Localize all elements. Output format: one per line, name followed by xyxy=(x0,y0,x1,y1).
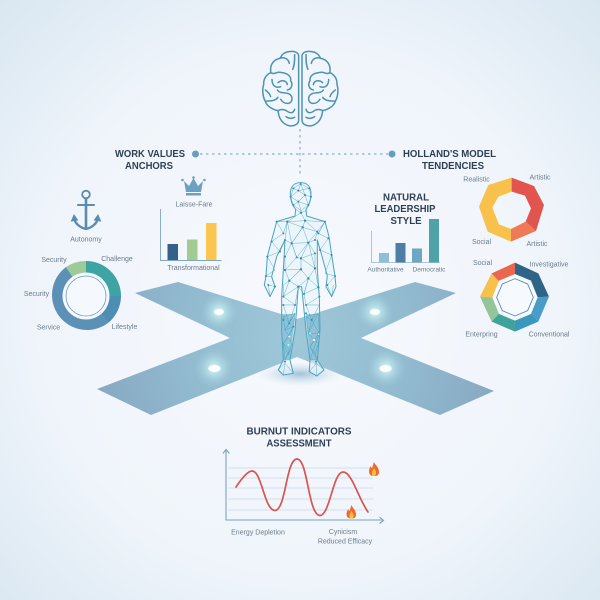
bar labels: Democratic xyxy=(413,266,446,274)
floor light: bottom right xyxy=(367,349,405,387)
figure mesh nodes xyxy=(265,183,336,363)
heading: burnout indicators assessment: ASSESSMENT xyxy=(266,438,332,450)
icon: flame upper xyxy=(369,462,379,476)
connector dot: holland xyxy=(388,150,396,158)
figure leg shading xyxy=(282,314,320,360)
octagon labels bottom: Enterpring xyxy=(465,332,498,338)
heading: holland's model tendencies: HOLLAND'S MODEL xyxy=(403,149,496,160)
octagon labels top: Social xyxy=(472,239,491,246)
figure knee highlights xyxy=(287,332,319,346)
donut segment: lifestyle xyxy=(99,296,121,323)
connector: dotted lines xyxy=(200,129,388,176)
icon: flame lower xyxy=(346,505,356,518)
label: Laissez-Faire: Laisse-Fare xyxy=(176,202,213,208)
label: Autonomy: Autonomy xyxy=(70,236,102,244)
floor light: bottom left xyxy=(195,349,233,387)
heading: burnout indicators assessment: BURNUT INDICATORS xyxy=(246,426,352,438)
figure mesh lines xyxy=(266,184,335,376)
heading: natural leadership style: LEADERSHIP xyxy=(374,204,436,215)
connector dot: work values xyxy=(192,150,199,158)
octagon labels bottom xyxy=(465,260,570,338)
heading: natural leadership style xyxy=(374,192,436,227)
octagon labels bottom: Social xyxy=(473,260,492,267)
octagon labels bottom: Conventional xyxy=(529,332,570,338)
bar labels xyxy=(367,266,446,274)
label: Transformational: Transformational xyxy=(167,265,220,272)
bar labels: Authoritative xyxy=(367,266,404,274)
heading: natural leadership style: NATURAL xyxy=(383,192,429,204)
burnout labels: Cynicism xyxy=(329,529,357,536)
donut inner ring xyxy=(62,272,110,320)
donut labels: Challenge xyxy=(101,256,133,263)
donut labels: Service xyxy=(37,324,60,332)
octagon chart: holland top xyxy=(479,178,544,242)
line chart: burnout xyxy=(223,450,384,524)
donut labels xyxy=(24,256,137,332)
heading: work values anchors: ANCHORS xyxy=(125,161,173,172)
octagon labels top: Realistic xyxy=(463,176,490,184)
donut labels: Lifestyle xyxy=(112,324,137,331)
shadow under figure xyxy=(258,362,342,386)
octagon labels bottom: Investigative xyxy=(530,262,569,268)
octagon labels top: Artistic xyxy=(530,174,551,182)
floor light: top right xyxy=(357,294,393,330)
bar chart: leadership left xyxy=(160,209,222,260)
burnout labels: Reduced Efficacy xyxy=(318,538,373,546)
donut segment: challenge xyxy=(86,261,121,296)
donut chart: work values xyxy=(52,261,121,330)
icon: crown xyxy=(181,176,206,196)
icon: brain xyxy=(263,51,338,126)
heading: holland's model tendencies: TENDENCIES xyxy=(422,161,484,172)
floor light: top left xyxy=(201,294,237,330)
heading: natural leadership style: STYLE xyxy=(390,216,422,227)
donut labels: Security xyxy=(41,257,67,264)
heading: burnout indicators assessment xyxy=(246,426,352,450)
bar chart: leadership right xyxy=(372,219,440,262)
octagon chart: holland bottom xyxy=(480,263,549,332)
icon: anchor xyxy=(72,191,100,229)
figure body fill xyxy=(264,183,336,376)
burnout labels xyxy=(231,529,373,546)
heading: holland's model tendencies xyxy=(403,149,496,172)
figure: low-poly human mesh xyxy=(264,183,336,376)
donut labels: Security xyxy=(24,291,50,298)
burnout labels: Energy Depletion xyxy=(231,530,285,536)
donut segment: green xyxy=(66,261,86,279)
heading: work values anchors xyxy=(115,149,185,172)
donut segment: service and security xyxy=(52,267,108,330)
floor: X-shaped crossroads xyxy=(97,282,494,415)
octagon labels top xyxy=(463,174,551,248)
octagon labels top: Artistic xyxy=(526,241,548,248)
heading: work values anchors: WORK VALUES xyxy=(115,149,185,160)
